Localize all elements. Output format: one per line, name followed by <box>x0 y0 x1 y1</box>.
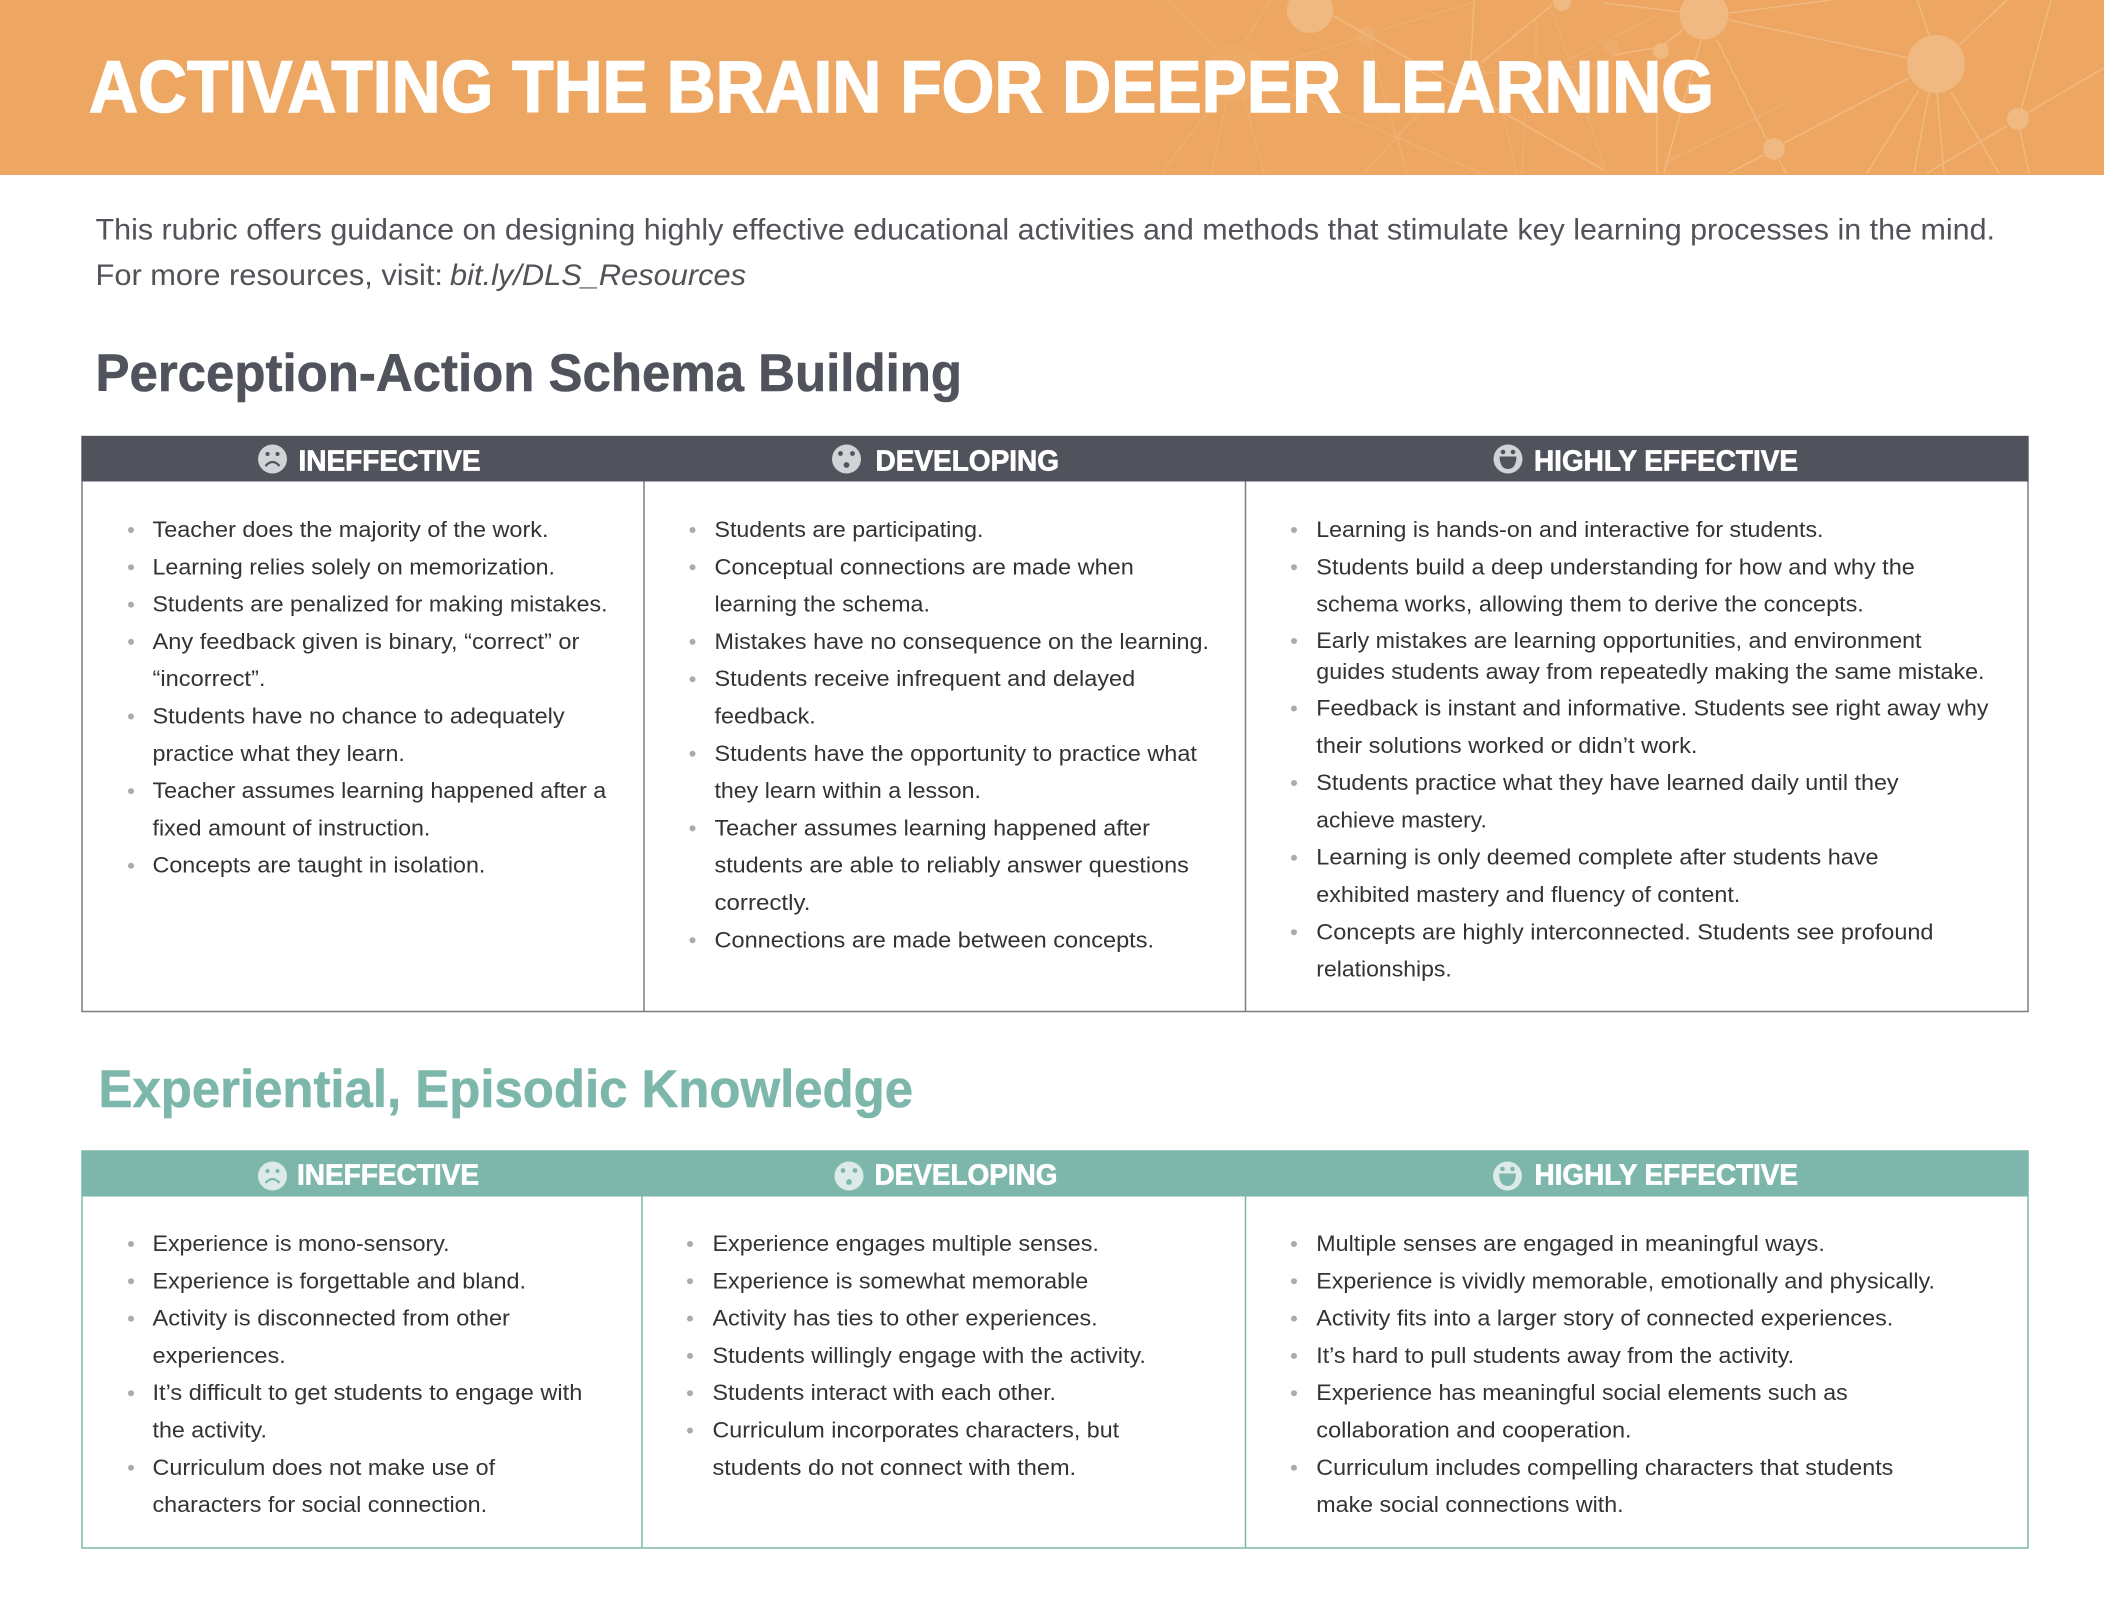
column: developing: Activity has ties to other experiences. <box>712 1306 1098 1331</box>
column: ineffective: Curriculum does not make use of <box>152 1455 496 1480</box>
column: developing: Curriculum incorporates characters, but <box>712 1418 1119 1442</box>
network graphic <box>1161 0 2104 173</box>
column: highly effective: Concepts are highly interconnected. Students see profound <box>1316 919 1934 944</box>
header: ineffective: INEFFECTIVE <box>297 1160 479 1192</box>
title: ACTIVATING THE BRAIN FOR DEEPER LEARNING <box>89 47 1714 128</box>
column: ineffective: the activity. <box>152 1418 267 1442</box>
heading: Perception-Action Schema Building: Perception-Action Schema Building <box>96 344 962 403</box>
header: ineffective: INEFFECTIVE <box>298 446 480 478</box>
intro text: This rubric offers guidance on designing highly effective educational activities and methods that stimulate key learning processes in the mind. <box>96 214 1995 246</box>
column: ineffective: Students are penalized for making mistakes. <box>152 592 608 617</box>
column: highly effective: Experience has meaningful social elements such as <box>1316 1380 1848 1405</box>
column: ineffective: Students have no chance to adequately <box>152 704 565 728</box>
heading: Experiential, Episodic Knowledge: Experiential, Episodic Knowledge <box>98 1060 913 1119</box>
header bar <box>82 1151 2028 1196</box>
header bar <box>82 436 2028 482</box>
column: developing: correctly. <box>714 890 810 915</box>
intro text: bit.ly/DLS_Resources <box>450 259 746 292</box>
column: developing: feedback. <box>714 704 816 728</box>
column: highly effective: Learning is hands-on and interactive for students. <box>1316 517 1824 542</box>
column: highly effective: schema works, allowing them to derive the concepts. <box>1316 592 1864 617</box>
column: highly effective <box>1291 517 1988 982</box>
header: highly effective: HIGHLY EFFECTIVE <box>1534 446 1798 478</box>
column: developing <box>687 1231 1146 1480</box>
column: developing: Students are participating. <box>714 517 984 542</box>
intro text: For more resources, visit: <box>96 259 443 292</box>
column: highly effective: Students build a deep understanding for how and why the <box>1316 554 1915 579</box>
column: developing: Conceptual connections are made when <box>714 554 1134 579</box>
column: highly effective: Activity fits into a larger story of connected experiences. <box>1316 1306 1893 1331</box>
column: developing: Students willingly engage with the activity. <box>712 1343 1146 1368</box>
column: developing: students are able to reliably answer questions <box>714 853 1189 878</box>
column: developing: Students interact with each other. <box>712 1380 1056 1405</box>
column: ineffective: Any feedback given is binary, “correct” or <box>152 629 579 654</box>
header: developing: DEVELOPING <box>874 1160 1058 1192</box>
column: developing: Mistakes have no consequence on the learning. <box>714 629 1209 654</box>
column: highly effective: Multiple senses are engaged in meaningful ways. <box>1316 1231 1825 1256</box>
column: ineffective: experiences. <box>152 1343 286 1368</box>
column: highly effective: collaboration and cooperation. <box>1316 1418 1632 1442</box>
intro text <box>96 214 1995 292</box>
column: ineffective: It’s difficult to get students to engage with <box>152 1380 582 1405</box>
column: developing: Students receive infrequent and delayed <box>714 666 1135 691</box>
column: ineffective: Activity is disconnected from other <box>152 1306 510 1331</box>
column: highly effective: Feedback is instant and informative. Students see right away why <box>1316 696 1988 720</box>
column: developing: they learn within a lesson. <box>714 778 981 803</box>
column: highly effective: Learning is only deemed complete after students have <box>1316 845 1878 870</box>
column: highly effective: It’s hard to pull students away from the activity. <box>1316 1343 1794 1368</box>
column: developing: Connections are made between concepts. <box>714 927 1154 952</box>
column: ineffective: Teacher assumes learning happened after a <box>152 778 607 803</box>
column: highly effective: make social connections with. <box>1316 1492 1624 1517</box>
header: developing: DEVELOPING <box>876 446 1059 478</box>
column: highly effective <box>1291 1231 1935 1517</box>
column: highly effective: Early mistakes are learning opportunities, and environment <box>1316 628 1922 653</box>
panel: perception-action rubric table <box>82 436 2028 1012</box>
column: developing: Students have the opportunity to practice what <box>714 741 1197 766</box>
header: highly effective: HIGHLY EFFECTIVE <box>1534 1160 1798 1192</box>
banner <box>0 0 2104 175</box>
column: developing: Experience is somewhat memorable <box>712 1268 1088 1293</box>
column: ineffective: Teacher does the majority of the work. <box>152 517 548 542</box>
column: ineffective: Experience is forgettable and bland. <box>152 1268 526 1293</box>
column: ineffective: Concepts are taught in isolation. <box>152 853 485 878</box>
column: ineffective: Learning relies solely on memorization. <box>152 554 555 579</box>
column: highly effective: relationships. <box>1316 956 1452 982</box>
column: highly effective: achieve mastery. <box>1316 807 1487 832</box>
table frame <box>82 1151 2028 1548</box>
column: ineffective: characters for social connection. <box>152 1492 487 1517</box>
panel: experiential rubric table <box>82 1151 2028 1548</box>
column: developing: Teacher assumes learning happened after <box>714 815 1150 840</box>
column: developing: students do not connect with them. <box>712 1455 1076 1480</box>
table frame <box>82 436 2028 1012</box>
column: highly effective: Students practice what they have learned daily until they <box>1316 770 1899 795</box>
column: ineffective: practice what they learn. <box>152 741 405 766</box>
column: developing: Experience engages multiple senses. <box>712 1231 1099 1256</box>
column: ineffective: Experience is mono-sensory. <box>152 1231 450 1256</box>
column: ineffective: fixed amount of instruction. <box>152 815 430 840</box>
column: highly effective: Curriculum includes compelling characters that students <box>1316 1455 1893 1480</box>
column: highly effective: exhibited mastery and fluency of content. <box>1316 882 1740 907</box>
column: ineffective <box>128 517 608 878</box>
column: ineffective: “incorrect”. <box>152 666 265 691</box>
column: developing: learning the schema. <box>714 592 930 617</box>
column: highly effective: their solutions worked or didn’t work. <box>1316 733 1697 758</box>
column: highly effective: Experience is vividly memorable, emotionally and physically. <box>1316 1268 1935 1293</box>
column: highly effective: guides students away from repeatedly making the same mistake. <box>1316 659 1984 684</box>
column: ineffective <box>128 1231 582 1517</box>
column: developing <box>690 517 1209 952</box>
